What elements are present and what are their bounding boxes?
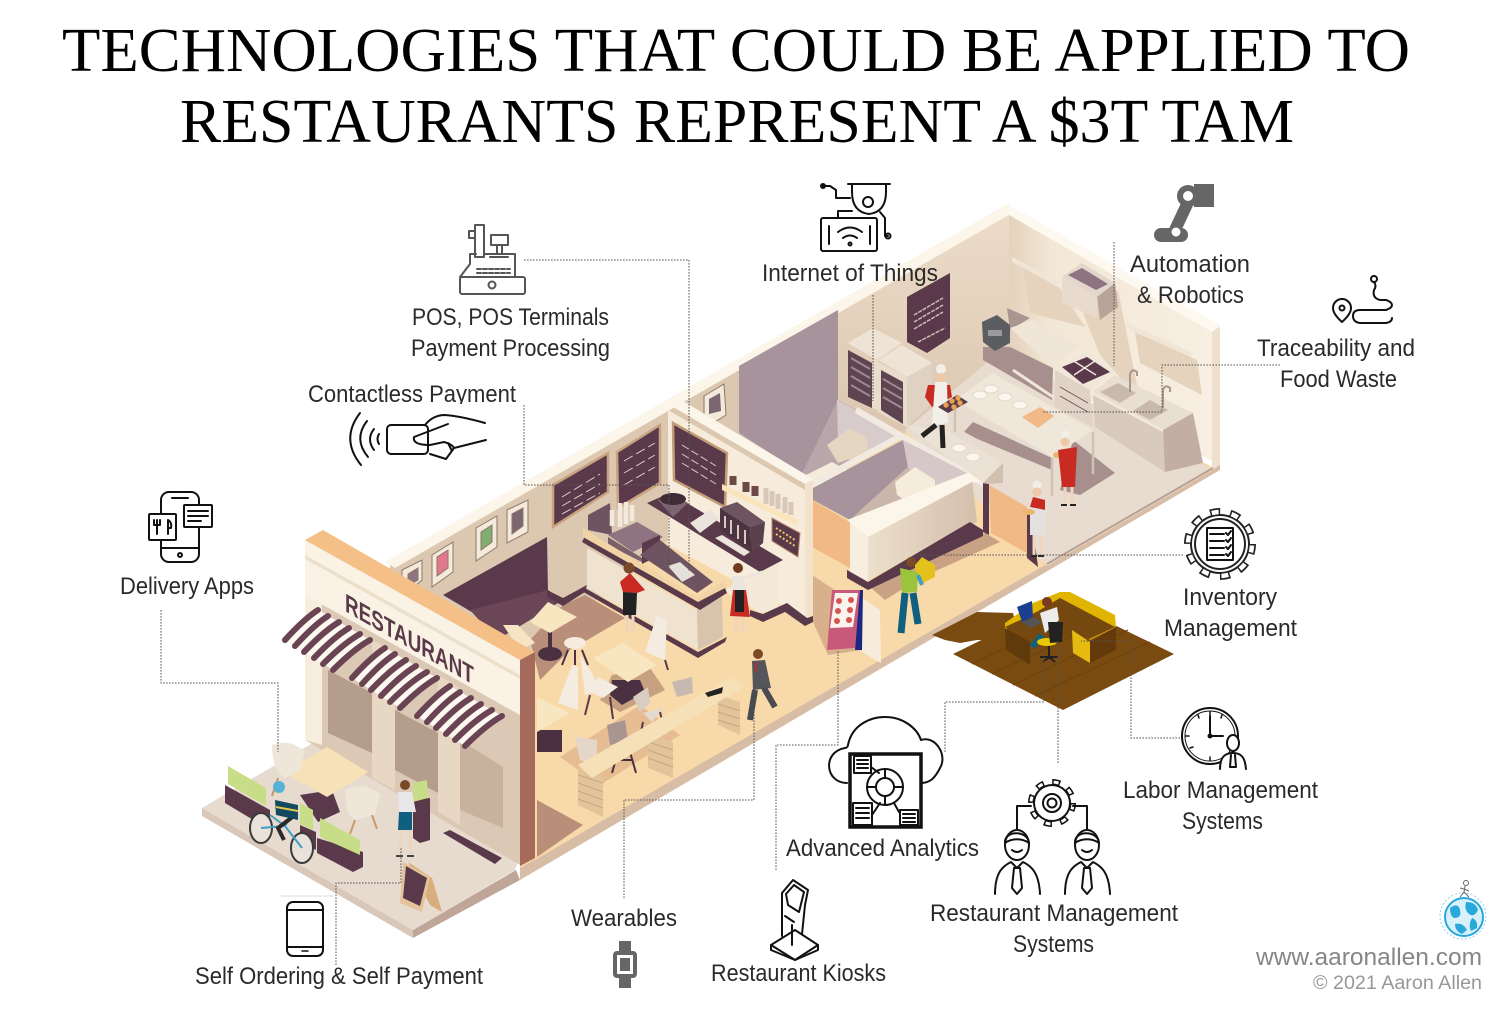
cyclist <box>250 781 313 863</box>
label: labor management systems: Systems <box>1182 808 1263 835</box>
businessman <box>750 649 775 720</box>
label: labor management systems <box>1123 777 1318 835</box>
toilet stall one <box>800 400 987 490</box>
icon: wearable watch <box>615 941 635 988</box>
icon: cash register <box>460 225 525 294</box>
office desk <box>1005 592 1116 665</box>
chef three <box>1023 480 1045 556</box>
orange doors <box>812 485 1027 568</box>
icon: analytics cloud <box>829 717 942 827</box>
delivery man <box>900 557 935 633</box>
back wall <box>385 203 1014 650</box>
label: automation and robotics: & Robotics <box>1137 282 1244 309</box>
kitchen front edge line <box>1047 468 1213 564</box>
icon: labor clock <box>1182 708 1246 769</box>
label: labor management systems: Labor Management <box>1123 777 1318 804</box>
label: internet of things: Internet of Things <box>762 260 938 287</box>
serving counter <box>580 528 727 658</box>
kitchen floor <box>905 352 1213 566</box>
restroom gray wall <box>739 310 838 474</box>
corridor picture <box>704 384 726 423</box>
chalkboards <box>553 425 660 527</box>
label: automation and robotics: Automation <box>1130 251 1250 278</box>
stool <box>562 637 588 665</box>
oven racks <box>848 328 932 427</box>
label: restaurant management systems: Restaurant Management <box>930 900 1178 927</box>
kitchen lower counter with plates <box>905 425 1003 484</box>
dining and corridor floor <box>535 530 1038 860</box>
title <box>62 17 1410 156</box>
floor front edge <box>520 462 1220 880</box>
icon: delivery app phone <box>149 492 212 562</box>
dining table three <box>537 697 570 752</box>
label: traceability and food waste: Food Waste <box>1280 366 1397 393</box>
icon: management gear and people <box>995 782 1110 894</box>
a-frame sign <box>400 862 442 912</box>
icon: internet of things <box>821 184 890 251</box>
label: self ordering and self payment: Self Ordering & Self Payment <box>195 963 483 990</box>
icon: inventory gear <box>1188 512 1252 576</box>
logo: globe <box>1440 880 1486 939</box>
icon: traceability route <box>1333 276 1392 323</box>
floor shadows <box>530 533 1000 857</box>
facade <box>305 530 535 866</box>
booth <box>443 537 587 650</box>
kitchen right wall <box>1009 205 1220 470</box>
gray floor shadow <box>1060 440 1115 495</box>
cashier <box>620 562 645 632</box>
label: automation and robotics <box>1130 251 1250 309</box>
label: pos terminals <box>411 304 610 362</box>
label: inventory management: Inventory <box>1183 584 1277 611</box>
back counter <box>647 493 813 626</box>
chairs <box>558 615 693 765</box>
connector lines <box>161 242 1280 965</box>
kitchen island <box>955 373 1093 496</box>
dining table one <box>530 602 577 661</box>
toilet stall two <box>807 433 970 535</box>
sidewalk <box>202 737 522 938</box>
awning one <box>285 610 370 670</box>
dining table two <box>593 643 657 705</box>
chalkboard writing <box>562 443 655 514</box>
stall front wall <box>847 472 1038 590</box>
kitchen poster <box>907 273 950 353</box>
label: restaurant management systems: Systems <box>1013 931 1094 958</box>
coffee station <box>588 502 663 564</box>
label: pos terminals: POS, POS Terminals <box>412 304 609 331</box>
wall shelf with bottles <box>722 476 798 526</box>
partition wall facing dining <box>668 398 813 620</box>
outdoor table <box>283 747 368 822</box>
label: delivery apps: Delivery Apps <box>120 573 254 600</box>
wall pictures <box>402 500 528 590</box>
label: traceability and food waste <box>1257 335 1415 393</box>
waitress <box>730 563 762 632</box>
label: inventory management: Management <box>1164 615 1297 642</box>
illustration: isometric restaurant <box>202 203 1220 938</box>
kiosk <box>827 590 881 663</box>
woman outside <box>396 780 416 856</box>
label: restaurant management systems <box>930 900 1178 958</box>
chef one <box>922 364 968 448</box>
website: www.aaronallen.com <box>1255 944 1482 971</box>
title: TECHNOLOGIES THAT COULD BE APPLIED TO <box>62 17 1410 85</box>
espresso machines <box>715 502 765 556</box>
icon: contactless card and hand <box>350 413 486 465</box>
label: pos terminals: Payment Processing <box>411 335 610 362</box>
icon: robotic arm <box>1154 184 1214 242</box>
icon: kiosk <box>771 880 818 960</box>
range hood <box>1062 263 1118 320</box>
copyright: © 2021 Aaron Allen <box>1313 973 1482 994</box>
planters <box>225 766 430 872</box>
label: contactless payment: Contactless Payment <box>308 381 516 408</box>
icon: self ordering phone <box>280 896 333 956</box>
sign text: RESTAURANT <box>345 587 474 691</box>
title: RESTAURANTS REPRESENT A $3T TAM <box>180 88 1294 156</box>
label: inventory management <box>1164 584 1297 642</box>
awning three <box>417 686 502 746</box>
bar table <box>578 678 745 817</box>
label: traceability and food waste: Traceability and <box>1257 335 1415 362</box>
awning two <box>352 648 437 708</box>
office floor <box>932 600 1174 710</box>
outdoor chairs <box>272 743 380 834</box>
chef two <box>1053 430 1077 505</box>
label: advanced analytics: Advanced Analytics <box>786 835 979 862</box>
sink counter <box>1093 370 1203 472</box>
label: wearables: Wearables <box>571 905 677 932</box>
stove <box>1055 352 1115 427</box>
kitchen counter along wall <box>982 308 1080 400</box>
base floor <box>520 360 1214 868</box>
label: restaurant kiosks: Restaurant Kiosks <box>711 960 886 987</box>
grill and toaster <box>658 493 720 533</box>
